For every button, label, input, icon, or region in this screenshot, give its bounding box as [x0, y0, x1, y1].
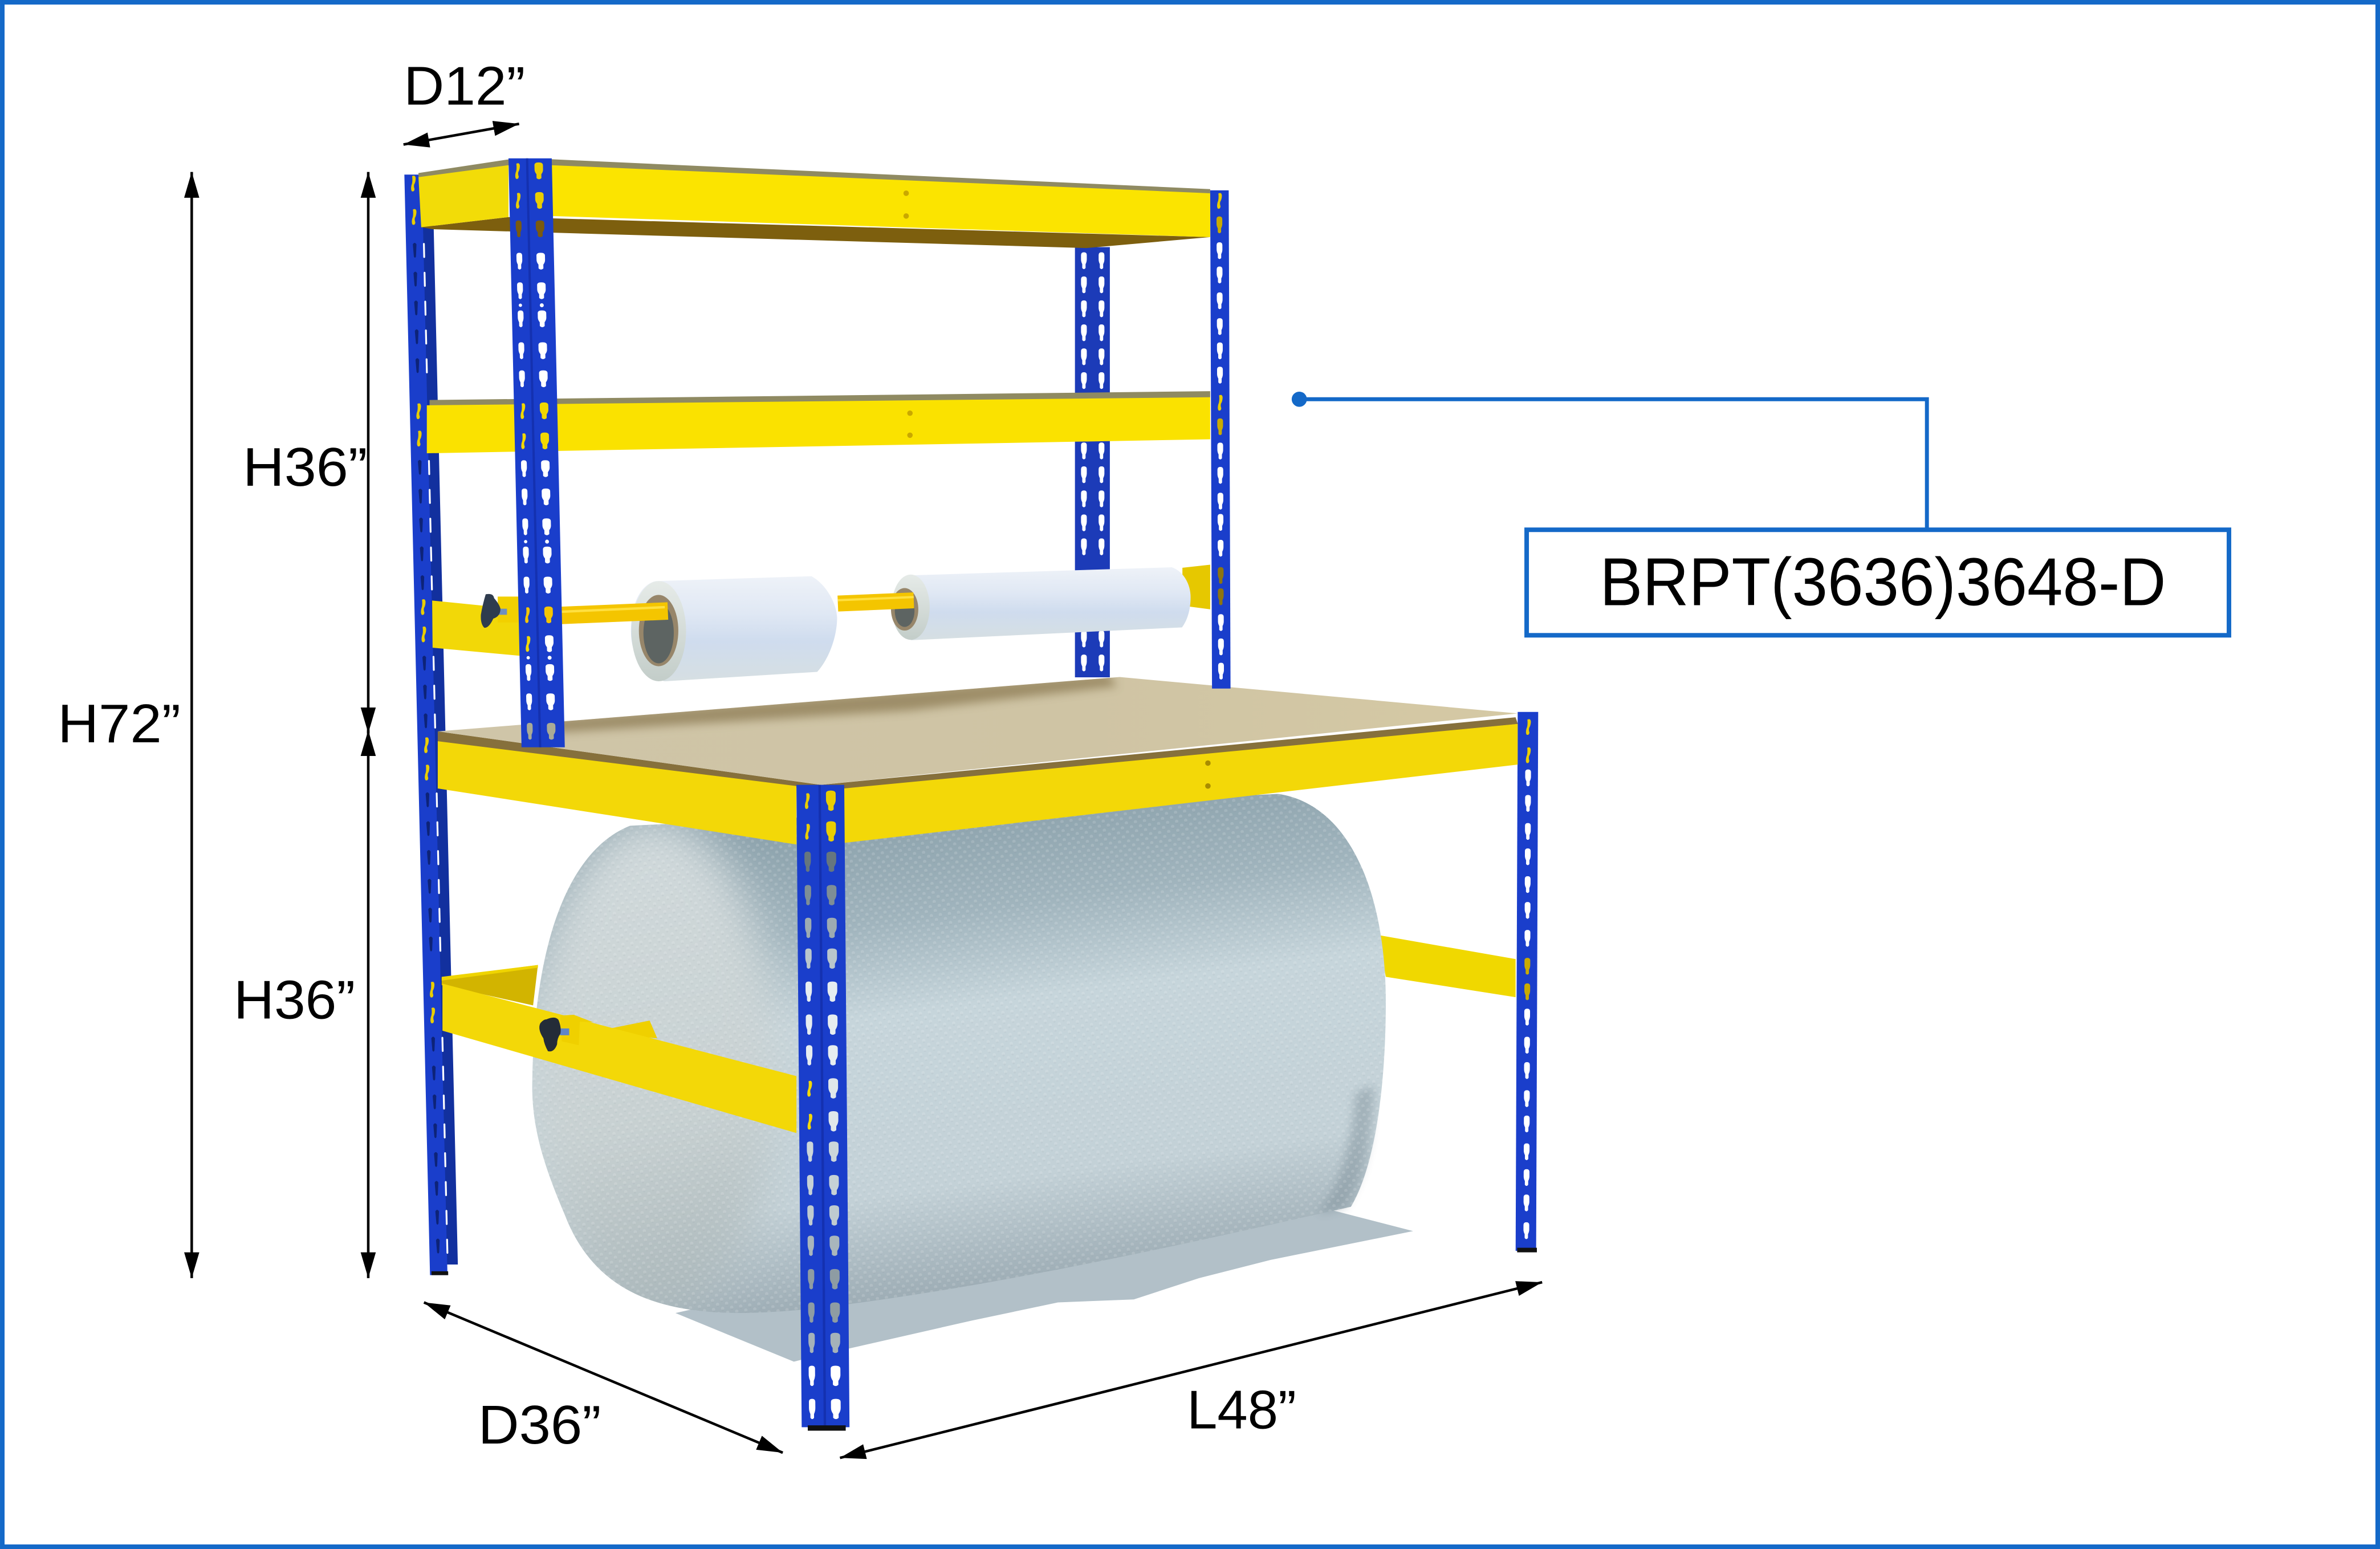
dimension arrow: total height: [191, 172, 192, 1278]
lower rear rail: [1378, 935, 1516, 997]
far left long upright: [404, 174, 458, 1275]
upper dispenser rod: [562, 597, 914, 615]
table board top: [438, 677, 1518, 785]
dimension arrow: upper height: [368, 172, 369, 733]
roll end face: [528, 816, 777, 1318]
product illustration: packing bench: [404, 158, 1539, 1431]
lower dispenser rail and rod: [442, 965, 796, 1133]
dimension label: lower H36: H36”: [234, 970, 355, 1031]
dimension arrow: top shelf depth: [404, 124, 519, 144]
bubble wrap roll: [528, 794, 1386, 1318]
upper right upright: [1210, 190, 1231, 689]
upper rod knob: [481, 594, 519, 628]
board shadow band along rear edge: [547, 674, 1117, 733]
stretch film roll, long: [891, 567, 1191, 640]
dimension arrow: lower height: [368, 730, 369, 1278]
product code: BRPT(3636)3648-D: [1600, 544, 2166, 620]
bubble wrap sheet on floor: [676, 1205, 1413, 1361]
dimension label: D36: D36”: [478, 1394, 601, 1456]
upper front-left upright: [508, 158, 565, 747]
bubble texture: [532, 794, 1386, 1313]
shadow on lower right of roll: [1317, 1085, 1374, 1214]
middle shelf: [427, 391, 1210, 453]
work table: [438, 674, 1518, 844]
upper left bracket: [432, 600, 520, 656]
rear upper upright: [1075, 247, 1110, 677]
front table beam: [844, 724, 1517, 843]
stretch film roll, short: [631, 576, 837, 681]
dimension arrow: table depth: [424, 1303, 783, 1453]
callout leader line: [1292, 392, 1927, 530]
dimension label: upper H36: H36”: [243, 437, 367, 498]
upper right bracket: [1182, 564, 1210, 609]
right lower upright: [1516, 712, 1539, 1253]
top shelf: [418, 159, 1210, 248]
dimension label: D12: D12”: [404, 56, 525, 116]
dimension label: L48: L48”: [1187, 1380, 1296, 1441]
left table beam: [438, 741, 796, 844]
roll body: [532, 794, 1386, 1313]
callout: product code box: [1527, 530, 2229, 635]
dimension arrow: table length: [840, 1282, 1542, 1458]
dimension label: H72: H72”: [58, 693, 181, 754]
lower rod knob: [539, 1018, 561, 1051]
table board edge: [438, 717, 1518, 790]
front main upright: [796, 785, 849, 1431]
